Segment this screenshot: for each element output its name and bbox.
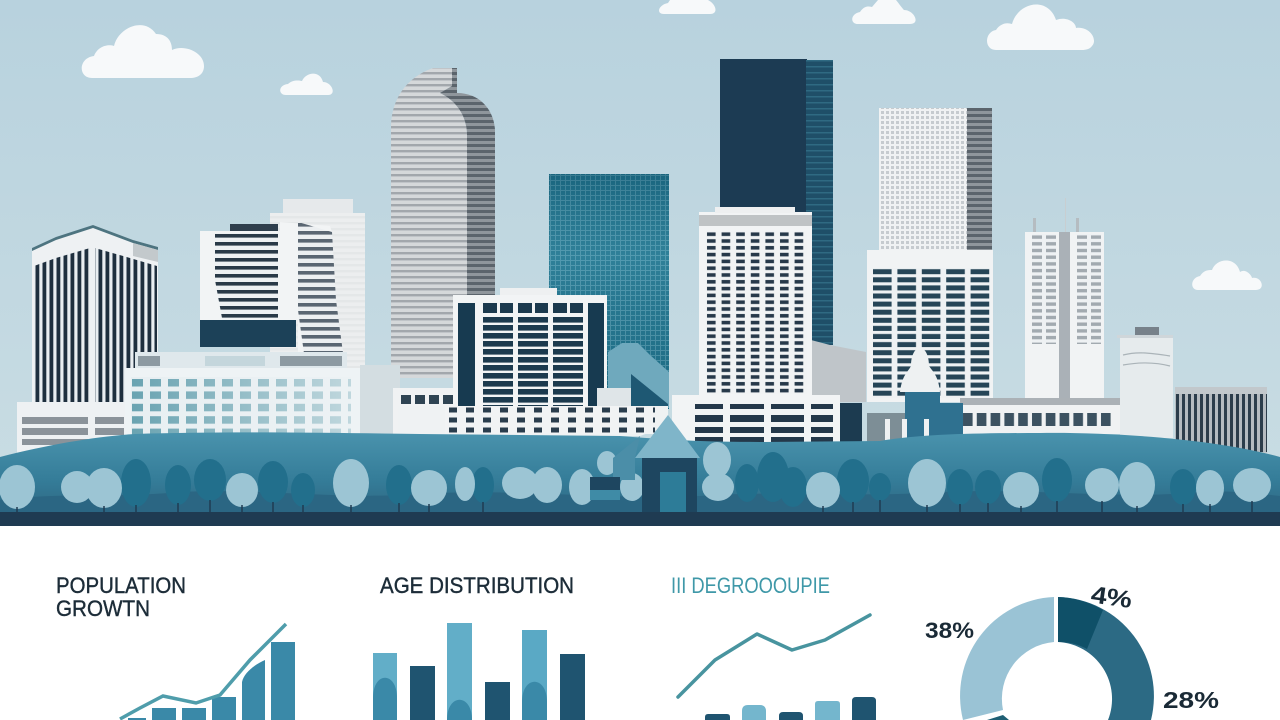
- cloud 1: [82, 25, 204, 78]
- label: 38%: 38%: [925, 618, 974, 643]
- building: teal peaked block: [597, 343, 669, 408]
- building: navy tower: [720, 59, 833, 345]
- heading: population growth: POPULATION: [56, 573, 186, 598]
- cloud 4: [852, 0, 916, 24]
- building: black and white office: [453, 288, 607, 410]
- building: striped mid tower: [200, 222, 345, 368]
- heading: age distribution: AGE DISTRIBUTION: [380, 573, 574, 598]
- building: rear white tower: [270, 199, 365, 378]
- donut segment: 38%: [960, 597, 1054, 720]
- building: teal glass tower: [549, 174, 669, 409]
- building: grey curved tower: [391, 68, 495, 378]
- cloud 3: [659, 0, 716, 14]
- building: white podium: [672, 395, 862, 445]
- building: left dark striped tower: [32, 225, 158, 413]
- hill: [0, 432, 1280, 526]
- light trees: [0, 442, 1271, 509]
- ground band: [0, 512, 1280, 526]
- sky: [0, 0, 1280, 470]
- cloud 6: [1192, 260, 1262, 290]
- chart panel: age distribution: [373, 573, 585, 720]
- bars: [128, 642, 295, 720]
- building: low window strip: [398, 406, 668, 436]
- building: twin tower: [1025, 198, 1104, 399]
- bars: [373, 623, 585, 720]
- heading: population growth: GROWTN: [56, 596, 150, 621]
- chart panel: population growth: [56, 573, 295, 720]
- clouds: [82, 0, 1262, 290]
- dark trees: [121, 452, 1196, 507]
- building: long low block: [960, 398, 1143, 434]
- building: left podium: [17, 402, 129, 454]
- label: 4%: 4%: [1089, 581, 1134, 614]
- donut segment: 28%: [1058, 597, 1154, 720]
- building: white grid tower: [879, 108, 992, 253]
- cloud 2: [280, 74, 333, 95]
- heading: demographics: III DEGROOOUPIE: [671, 573, 830, 598]
- tree trunks: [17, 500, 1252, 512]
- building: tall white windowed tower: [699, 207, 812, 397]
- skyline: [17, 59, 1267, 454]
- donut segment: 4%: [1058, 597, 1103, 649]
- building: low block beside tower: [393, 388, 465, 438]
- chart panel: demographics: [671, 573, 876, 720]
- trend line: [678, 615, 870, 697]
- building: round rotunda: [1117, 327, 1173, 438]
- heading: population growth: [56, 573, 186, 621]
- building: domed civic hall: [867, 348, 963, 443]
- building: dark barred block: [1175, 387, 1267, 453]
- building: hotel: [125, 352, 360, 440]
- building: grey wing right of navy tower: [811, 340, 866, 402]
- park pavilion: [590, 415, 700, 512]
- cloud 5: [987, 5, 1094, 50]
- label: 28%: 28%: [1163, 687, 1219, 713]
- donut segment: small lower: [987, 715, 1009, 720]
- chart panel: donut: [925, 581, 1219, 720]
- building: white slab tower: [867, 250, 993, 402]
- bars: [705, 697, 876, 720]
- trend line: [120, 624, 286, 719]
- dark tree-line shade: [0, 491, 1280, 512]
- building: pale grey wing: [360, 365, 400, 435]
